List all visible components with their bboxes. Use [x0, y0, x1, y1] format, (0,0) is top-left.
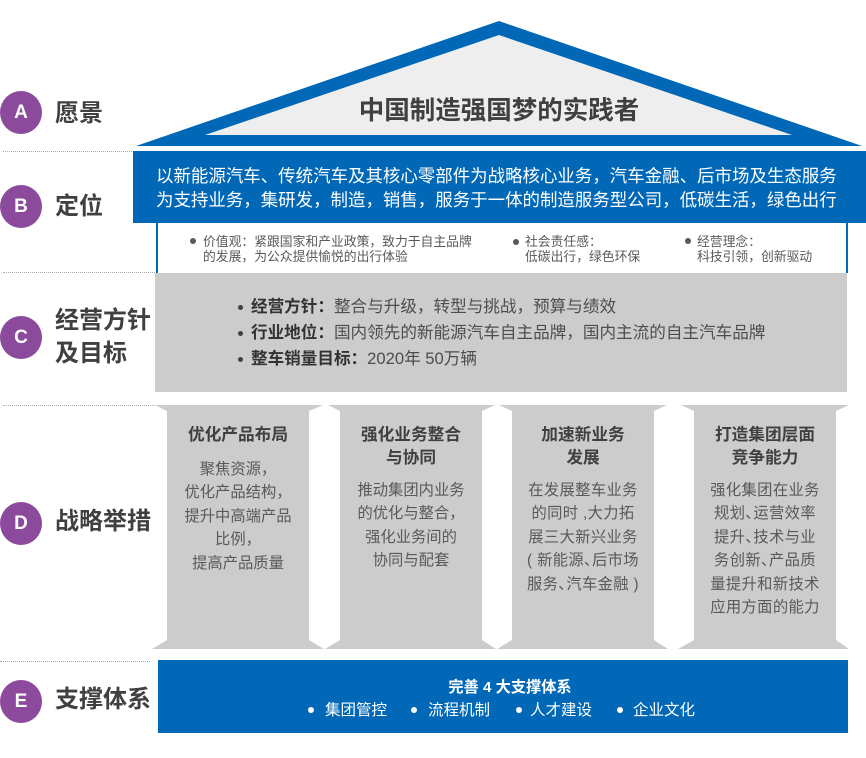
- positioning text: 为支持业务，集研发，制造，销售，服务于一体的制造服务型公司，低碳生活，绿色出行: [156, 190, 837, 210]
- row divider A: [3, 151, 134, 152]
- pillar 4 title: 竞争能力: [732, 448, 798, 466]
- badge D: [0, 502, 42, 545]
- pillar 4 text: [710, 482, 820, 616]
- bullet: [685, 238, 691, 244]
- label: 经营方针及目标: 及目标: [55, 340, 127, 367]
- bullet: [411, 707, 417, 713]
- value: 价值观: [190, 234, 472, 264]
- goal line 3: [238, 349, 477, 368]
- label: 支撑体系: 支撑体系: [55, 686, 151, 713]
- pillar 4 text: 量提升和新技术: [710, 576, 820, 593]
- pillar 3 text: ( 新能源、后市场: [527, 552, 639, 569]
- pillar 1 text: 比例，: [215, 531, 261, 548]
- pillar 1 text: 优化产品结构，: [184, 484, 292, 501]
- pillar 1 title: 优化产品布局: [188, 425, 288, 444]
- pillar 3 text: 展三大新兴业务: [528, 529, 638, 546]
- row divider C: [3, 405, 155, 406]
- value text: 社会责任感：: [525, 234, 602, 249]
- roof: vision: [136, 21, 862, 146]
- pillar 4 text: 务创新、产品质: [714, 552, 816, 569]
- bullet: [238, 357, 243, 362]
- badge C: C: [14, 327, 28, 348]
- pillar 2 text: [357, 482, 465, 569]
- item text: 企业文化: [633, 702, 695, 719]
- pillar 3 title: 发展: [566, 448, 600, 466]
- bullet: [516, 707, 522, 713]
- pillar 2 title: [361, 425, 461, 466]
- value text: 的发展，为公众提供愉悦的出行体验: [203, 249, 408, 264]
- positioning text: [156, 166, 837, 210]
- item text: 人才建设: [530, 702, 592, 719]
- pillar 1 text: 提升中高端产品: [184, 508, 292, 525]
- pillar 2 text: 协同与配套: [373, 552, 449, 569]
- value text: 经营理念：: [697, 234, 761, 249]
- support item 3: [516, 702, 592, 719]
- pillar 1 text: 聚焦资源，: [200, 461, 276, 478]
- bullet: [238, 331, 243, 336]
- goal line 2: [238, 323, 765, 342]
- pillar 2 text: 的优化与整合，: [357, 505, 465, 522]
- bullet: [190, 238, 196, 244]
- positioning text: 以新能源汽车、传统汽车及其核心零部件为战略核心业务，汽车金融、后市场及生态服务: [156, 166, 837, 186]
- item text: 集团管控: [325, 702, 387, 719]
- pillar 4 text: 提升、技术与业: [714, 529, 816, 546]
- badge B: [0, 185, 42, 228]
- goal line 1: [238, 297, 616, 316]
- badge E: [0, 680, 42, 723]
- item text: 流程机制: [428, 702, 490, 719]
- label: 经营方针及目标: [55, 307, 151, 367]
- goal text: 行业地位：国内领先的新能源汽车自主品牌，国内主流的自主汽车品牌: [251, 323, 765, 342]
- badge B: B: [14, 196, 28, 217]
- row divider D: [0, 661, 150, 662]
- pillar 2 text: 强化业务间的: [365, 529, 457, 546]
- pillar 3 title: [541, 425, 625, 466]
- badge E: E: [15, 691, 27, 712]
- label: 定位: 定位: [55, 193, 103, 220]
- bullet: [513, 239, 519, 245]
- support item 1: [308, 702, 387, 719]
- badge C: [0, 316, 42, 359]
- pillar 3 title: 加速新业务: [541, 425, 625, 444]
- value text: [525, 234, 640, 264]
- badge D: D: [14, 513, 28, 534]
- pillar 2 title: 强化业务整合: [361, 425, 461, 444]
- pillar 3 text: 在发展整车业务: [528, 482, 638, 499]
- pillar 1 text: [184, 460, 292, 572]
- badge A: [0, 91, 42, 134]
- panel: positioning: [133, 151, 866, 223]
- pillar 4 text: 强化集团在业务: [710, 482, 820, 499]
- bullet: [617, 707, 623, 713]
- value text: 科技引领，创新驱动: [697, 249, 812, 264]
- value text: [203, 234, 472, 264]
- value text: 低碳出行，绿色环保: [525, 249, 640, 264]
- label: 战略举措: 战略举措: [55, 508, 151, 535]
- label: 经营方针及目标: 经营方针: [55, 307, 151, 334]
- pillar 3 text: 服务、汽车金融 ): [527, 576, 639, 593]
- pillars: [152, 405, 849, 649]
- support item 2: [411, 702, 490, 719]
- pillar 2 text: 推动集团内业务: [357, 482, 465, 499]
- goal text: 经营方针：整合与升级，转型与挑战，预算与绩效: [251, 297, 616, 316]
- value text: [697, 234, 812, 264]
- goal text: 整车销量目标：2020年 50万辆: [251, 349, 477, 368]
- bullet: [308, 707, 314, 713]
- pillar 4 text: 规划、运营效率: [714, 505, 816, 522]
- vision title: 中国制造强国梦的实践者: [359, 97, 639, 125]
- pillar 4 text: 应用方面的能力: [710, 599, 820, 616]
- support item 4: [617, 702, 695, 719]
- bullet: [238, 305, 243, 310]
- panel: values: [156, 223, 848, 273]
- value: 社会责任感: [513, 234, 640, 264]
- pillar 2 title: 与协同: [386, 448, 436, 466]
- pillar 3 text: [527, 482, 639, 593]
- panel: policy and goals: [155, 273, 847, 392]
- label: 愿景: 愿景: [55, 100, 103, 127]
- pillar 3 text: 的同时 ,大力拓: [531, 505, 635, 522]
- badge A: A: [14, 102, 28, 123]
- value text: 价值观：紧跟国家和产业政策，致力于自主品牌: [203, 234, 472, 249]
- support heading: 完善 4 大支撑体系: [448, 679, 572, 696]
- row divider B: [3, 272, 155, 273]
- value: 经营理念: [685, 234, 812, 264]
- panel: support systems: [158, 660, 848, 733]
- pillar 4 title: 打造集团层面: [715, 425, 815, 444]
- pillar 1 text: 提高产品质量: [192, 555, 284, 572]
- pillar 4 title: [715, 425, 815, 466]
